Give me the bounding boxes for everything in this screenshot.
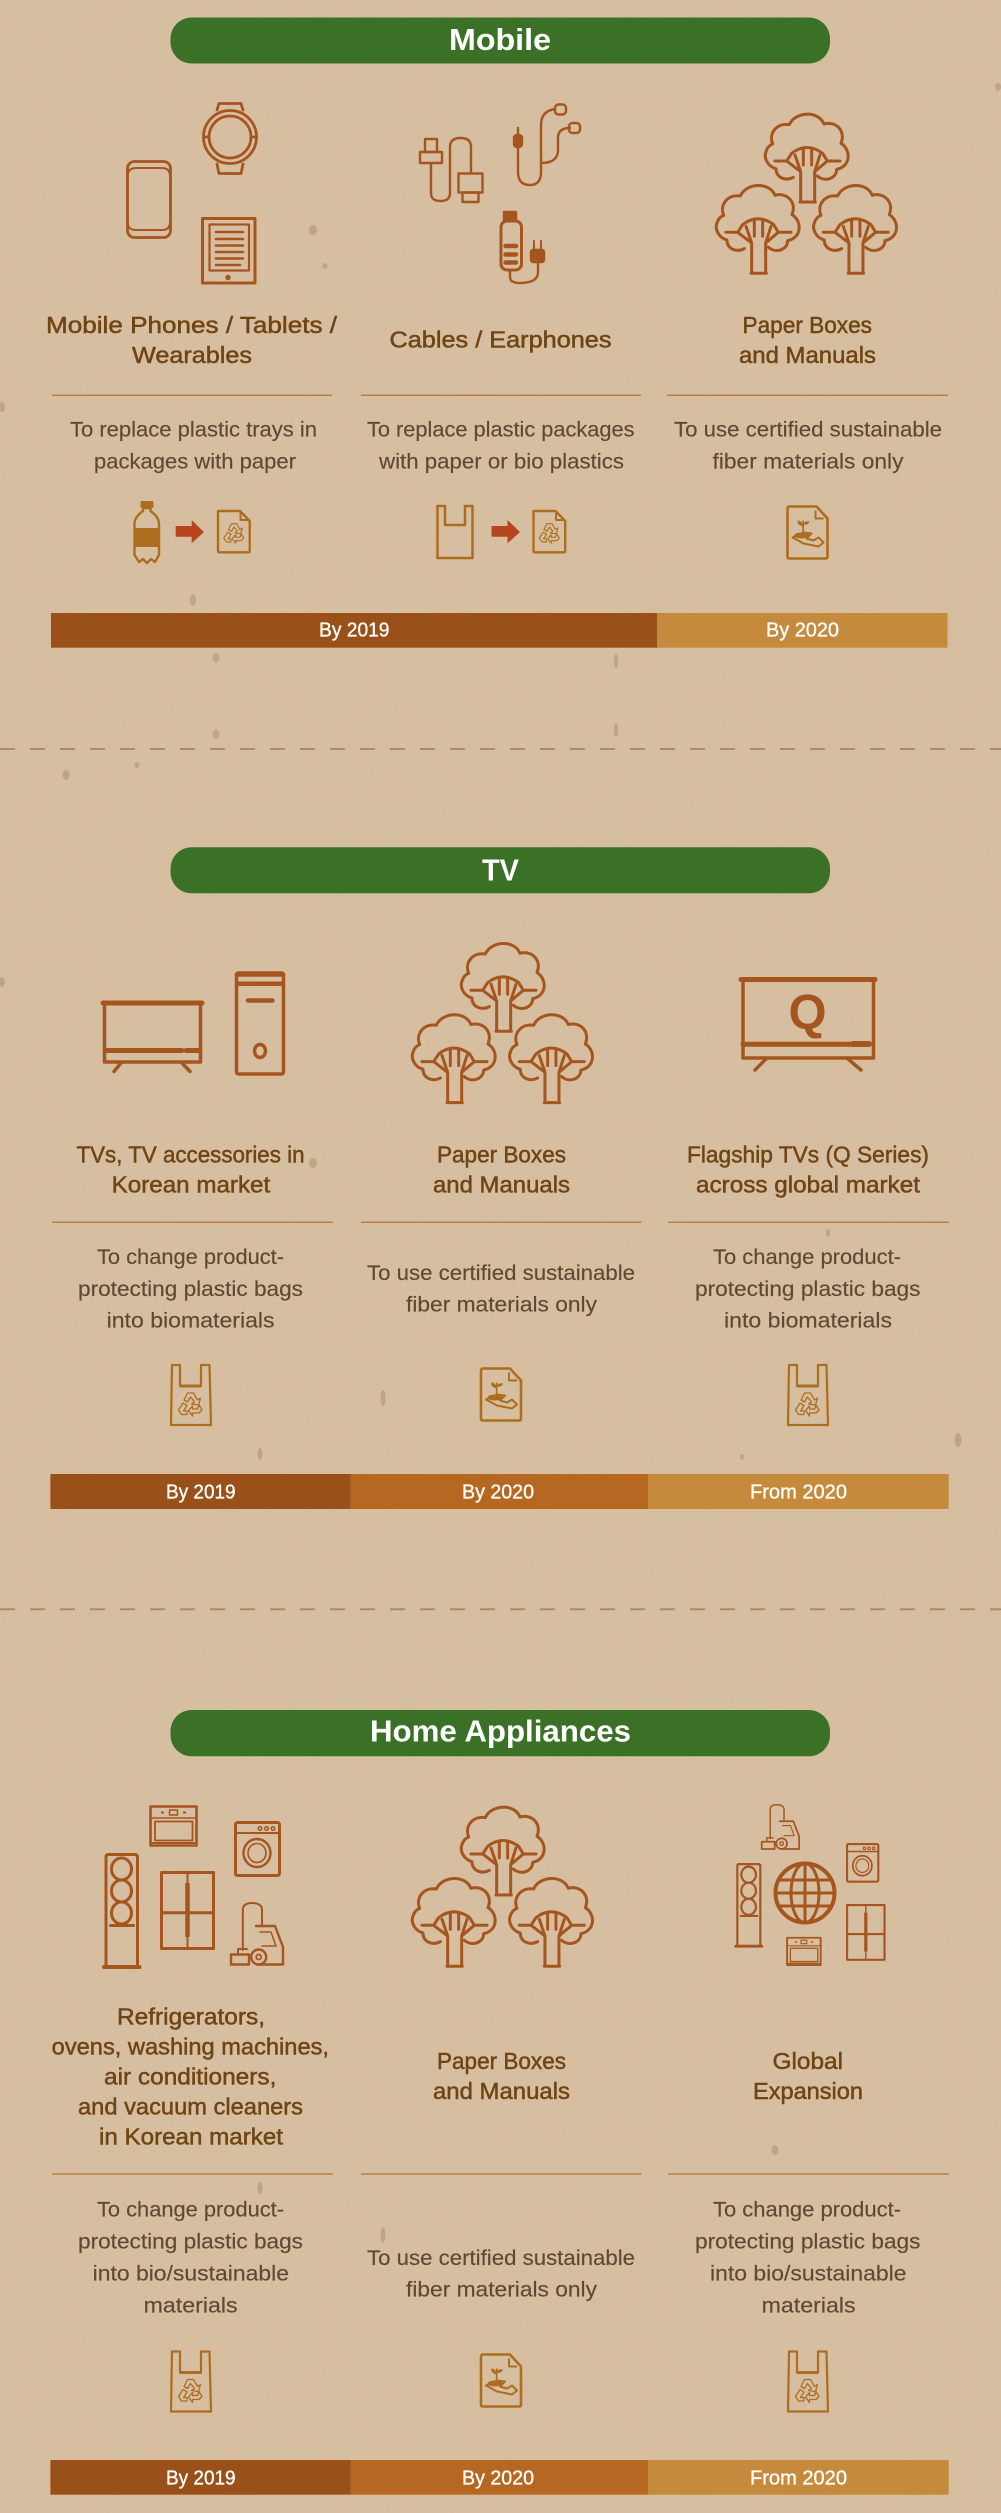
icon: phone, watch, e-reader	[128, 104, 256, 283]
heading: flagship TVs: Flagship TVs (Q Series)	[687, 1142, 929, 1168]
timeline bar: From 2020	[750, 2466, 847, 2489]
heading: paper boxes: and Manuals	[433, 2078, 570, 2104]
text: appliances goal: materials	[144, 2294, 238, 2318]
heading: TVs: Korean market	[112, 1171, 271, 1197]
icon: document with seedling in hand	[481, 2354, 521, 2406]
icon: document with seedling in hand	[481, 1368, 521, 1420]
heading: paper boxes: and Manuals	[739, 342, 876, 368]
text: paper boxes goal: fiber materials only	[406, 2278, 597, 2302]
timeline bar: By 2019	[166, 2466, 236, 2489]
icon: three trees	[412, 943, 592, 1103]
heading: appliances list: Refrigerators,	[117, 2003, 265, 2029]
panel: paper boxes and manuals	[361, 943, 642, 1420]
text: mobile phones goal: packages with paper	[94, 449, 296, 473]
heading: global expansion: Global	[772, 2048, 843, 2074]
section: Home Appliances	[50, 1710, 949, 2495]
icon: document with seedling in hand	[788, 506, 828, 558]
text: flagship TVs goal: into biomaterials	[724, 1309, 892, 1333]
section: Mobile	[46, 18, 948, 648]
timeline bar: By 2020	[462, 1480, 534, 1503]
icon: recyclable bag	[788, 1365, 828, 1425]
icon: plastic bag to recyclable paper	[438, 506, 565, 558]
heading: paper boxes	[433, 2048, 570, 2104]
heading: appliances list: air conditioners,	[104, 2063, 276, 2089]
text: paper boxes goal: To use certified sustainable	[367, 2246, 635, 2270]
panel: paper boxes and manuals	[361, 1807, 642, 2406]
text: TVs goal: protecting plastic bags	[78, 1277, 303, 1301]
timeline bar: By 2019	[319, 619, 390, 642]
text: paper boxes goal	[367, 2246, 635, 2302]
text: global goal: To change product-	[713, 2198, 901, 2222]
heading: paper boxes: Paper Boxes	[437, 2048, 566, 2074]
icon: three trees	[412, 1807, 592, 1966]
panel: cables and earphones	[361, 104, 641, 558]
text: paper boxes goal	[674, 418, 942, 473]
text: cables goal: To replace plastic packages	[367, 418, 634, 442]
text: flagship TVs goal: protecting plastic bags	[695, 1277, 920, 1301]
text: appliances goal	[78, 2198, 303, 2318]
heading: global expansion	[753, 2048, 863, 2104]
icon: plastic bottle to recyclable paper	[134, 501, 250, 563]
heading pill: TV	[170, 847, 830, 893]
heading pill: Home Appliances	[170, 1710, 830, 1756]
timeline bar	[51, 613, 948, 648]
text: paper boxes goal: To use certified sustainable	[367, 1261, 635, 1285]
text: mobile phones goal	[70, 418, 317, 473]
icon: TV and accessory tower	[103, 973, 284, 1074]
heading: mobile phones: Wearables	[132, 342, 252, 368]
heading: paper boxes: Paper Boxes	[742, 312, 872, 338]
icon: three trees	[716, 114, 896, 273]
text: paper boxes goal: fiber materials only	[406, 1293, 597, 1317]
heading pill: Mobile	[170, 18, 830, 64]
text: TVs goal	[78, 1245, 303, 1333]
heading: paper boxes: Paper Boxes	[437, 1142, 566, 1168]
heading: paper boxes	[433, 1142, 570, 1197]
text: global goal: into bio/sustainable	[710, 2262, 906, 2286]
icon: Q series TV	[741, 980, 875, 1070]
panel: home appliances in Korean market	[52, 1806, 333, 2412]
panel: mobile phones, tablets, wearables	[46, 104, 338, 563]
panel: global expansion	[668, 1805, 949, 2412]
timeline bar: By 2020	[766, 619, 839, 642]
text: appliances goal: into bio/sustainable	[93, 2262, 289, 2286]
timeline bar	[50, 2460, 949, 2495]
text: paper boxes goal: To use certified sustainable	[674, 418, 942, 442]
heading: paper boxes: and Manuals	[433, 1171, 570, 1197]
icon: air conditioner, oven, washer, fridge, vacuum	[104, 1806, 283, 1967]
icon: cable, earphones, charger	[420, 104, 580, 283]
heading: appliances list: ovens, washing machines,	[52, 2033, 329, 2059]
text: global goal: protecting plastic bags	[695, 2230, 920, 2254]
text: TVs goal: into biomaterials	[107, 1309, 275, 1333]
icon: globe surrounded by appliances	[736, 1805, 885, 1965]
timeline bar: From 2020	[750, 1480, 847, 1503]
text: cables goal	[367, 418, 634, 473]
heading pill: Mobile: Mobile	[449, 22, 551, 57]
text: appliances goal: protecting plastic bags	[78, 2230, 303, 2254]
icon: recyclable bag	[788, 2352, 828, 2412]
heading: mobile phones	[46, 312, 338, 368]
heading: appliances list	[52, 2003, 329, 2149]
heading: appliances list: and vacuum cleaners	[78, 2093, 303, 2119]
text: TVs goal: To change product-	[97, 1245, 284, 1269]
panel: flagship TVs	[668, 980, 949, 1425]
heading: paper boxes	[739, 312, 876, 368]
section: TV	[50, 847, 949, 1509]
timeline bar: By 2020	[462, 2466, 534, 2489]
timeline bar	[50, 1474, 949, 1509]
heading: global expansion: Expansion	[753, 2078, 863, 2104]
text: paper boxes goal	[367, 1261, 635, 1317]
text: appliances goal: To change product-	[97, 2198, 284, 2222]
text: flagship TVs goal: To change product-	[713, 1245, 901, 1269]
heading: cables and earphones: Cables / Earphones	[390, 326, 612, 352]
heading pill: Home Appliances: Home Appliances	[370, 1714, 631, 1749]
text: mobile phones goal: To replace plastic trays in	[70, 418, 317, 442]
text: flagship TVs goal	[695, 1245, 920, 1333]
heading: mobile phones: Mobile Phones / Tablets /	[46, 312, 338, 338]
heading: TVs: TVs, TV accessories in	[76, 1142, 304, 1168]
panel: TVs in Korean market	[52, 973, 333, 1425]
heading: TVs	[76, 1142, 304, 1197]
icon: recyclable bag	[171, 1365, 211, 1425]
text: cables goal: with paper or bio plastics	[378, 449, 624, 473]
heading pill: TV: TV	[482, 853, 519, 888]
icon: Q series TV: Q	[788, 986, 827, 1040]
timeline bar: By 2019	[166, 1480, 236, 1503]
panel: paper boxes and manuals	[667, 114, 948, 559]
heading: appliances list: in Korean market	[99, 2123, 283, 2149]
heading: flagship TVs: across global market	[696, 1171, 920, 1197]
text: paper boxes goal: fiber materials only	[712, 449, 904, 473]
text: global goal: materials	[762, 2294, 856, 2318]
icon: recyclable bag	[171, 2352, 211, 2412]
text: global goal	[695, 2198, 920, 2318]
heading: flagship TVs	[687, 1142, 929, 1197]
